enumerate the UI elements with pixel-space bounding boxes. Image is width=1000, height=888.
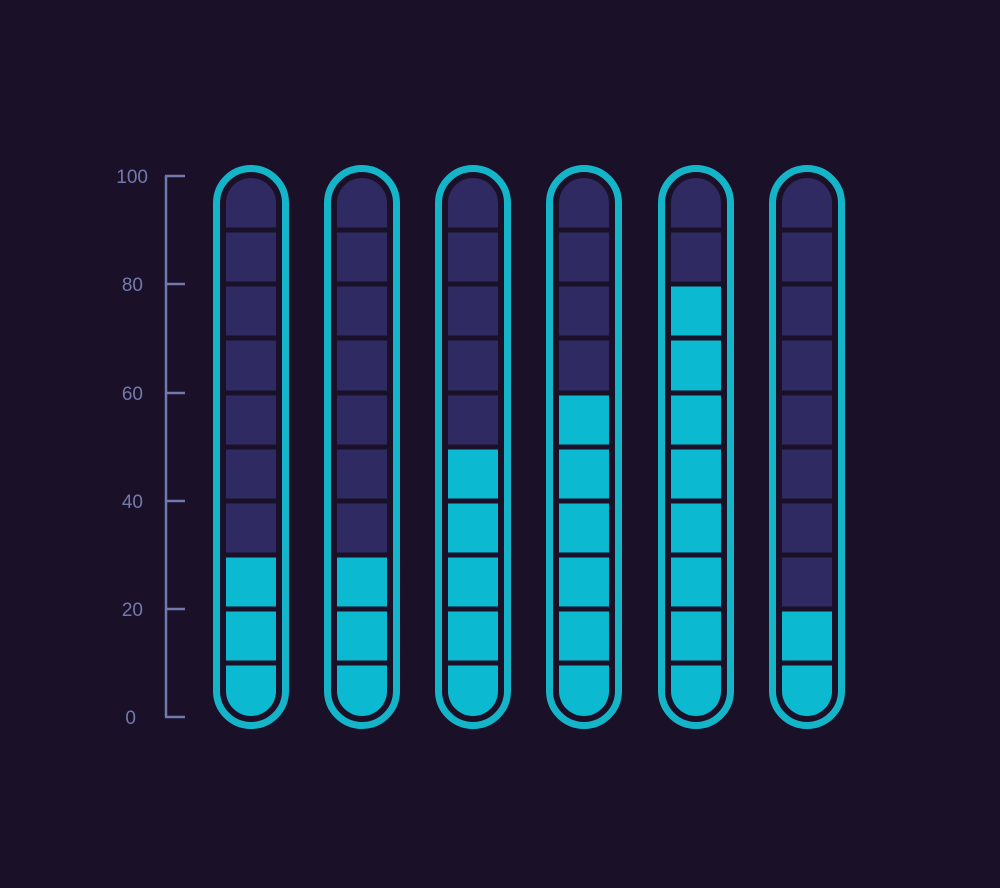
tube 4: 60 [550, 168, 618, 726]
tube 5: 80 [662, 168, 730, 726]
axis labels: 60 [122, 384, 143, 405]
axis labels [116, 167, 148, 729]
axis labels: 40 [122, 492, 143, 513]
axis labels: 80 [122, 275, 143, 296]
tube 2: 30 [328, 168, 396, 726]
axis labels: 0 [125, 708, 136, 729]
tube 6: 20 [772, 168, 842, 726]
axis labels: 100 [116, 167, 148, 188]
axis labels: 20 [122, 600, 143, 621]
tube 1: 30 [216, 168, 286, 726]
axis [165, 176, 185, 717]
tube 3: 50 [438, 168, 508, 726]
